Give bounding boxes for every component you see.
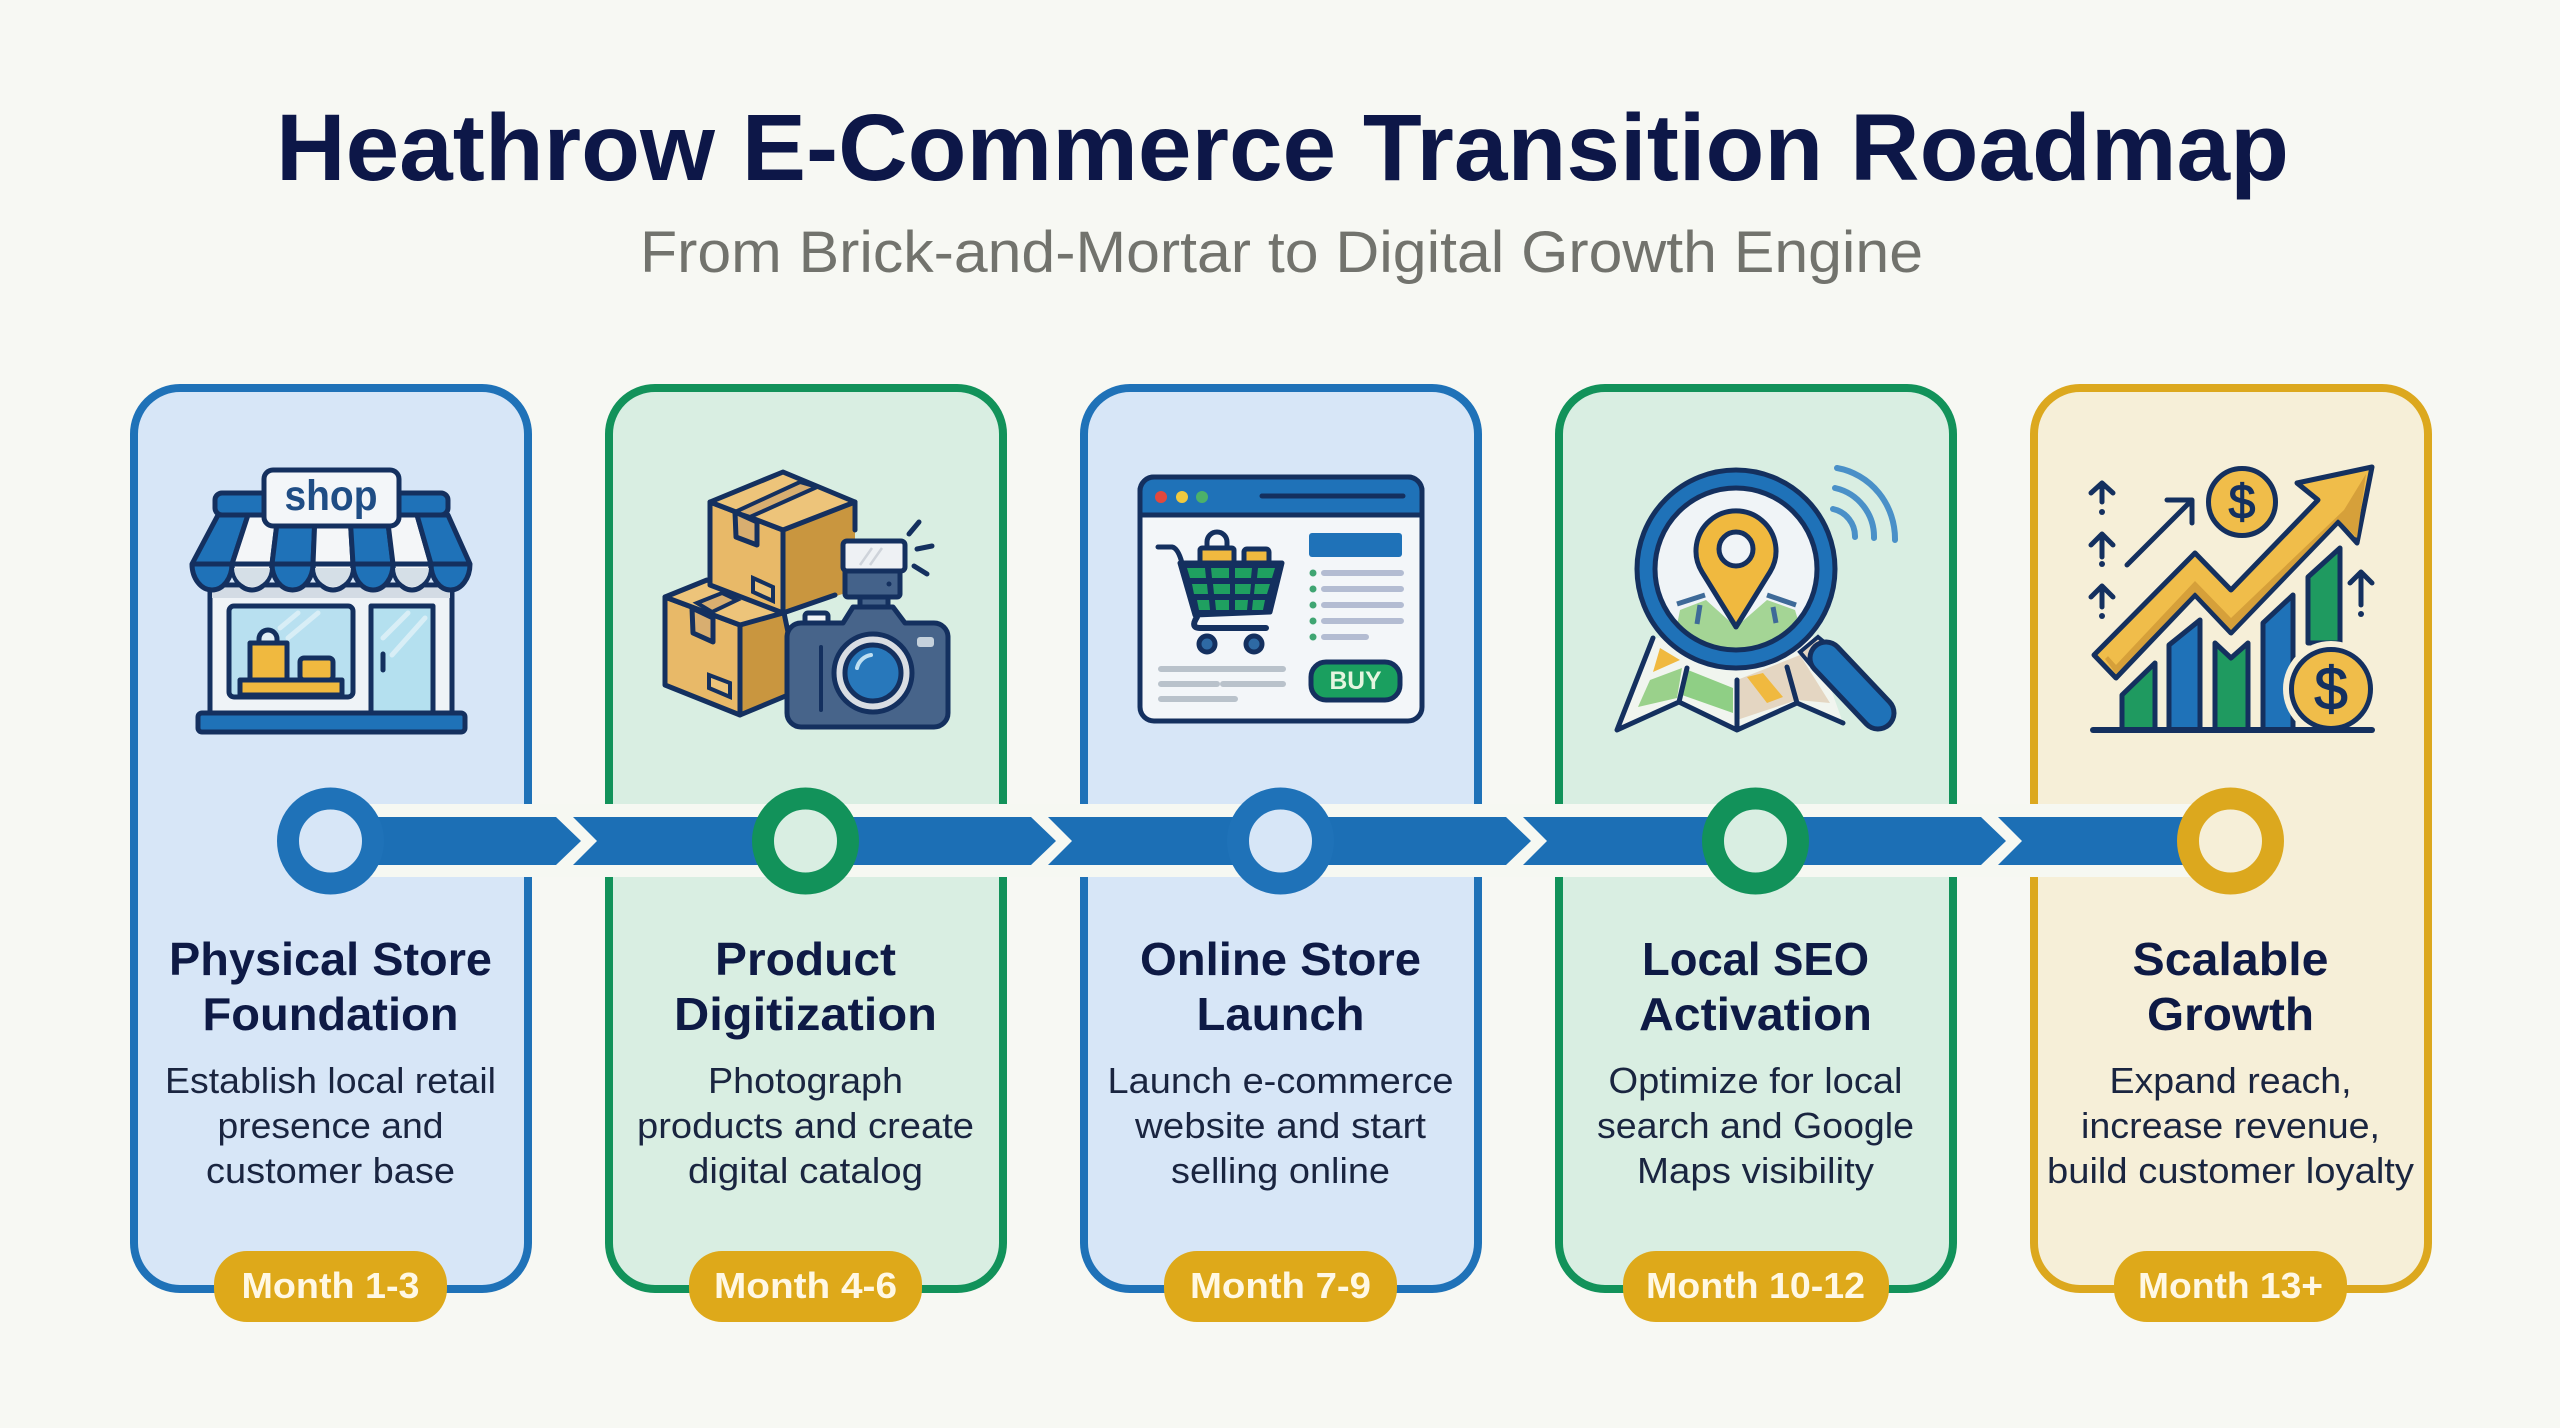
month badge: Month 13+ xyxy=(2138,1265,2323,1306)
step description xyxy=(2047,1060,2414,1191)
panel: local seo activation xyxy=(1559,388,1953,1322)
month badge: Month 7-9 xyxy=(1190,1265,1371,1306)
month badge xyxy=(214,1251,447,1322)
step description xyxy=(1597,1060,1914,1191)
step description: website and start xyxy=(1134,1105,1426,1146)
month badge xyxy=(1164,1251,1397,1322)
step description: products and create xyxy=(637,1105,974,1146)
step description: Photograph xyxy=(708,1060,903,1101)
timeline node 3 xyxy=(1238,798,1323,884)
panel: scalable growth xyxy=(2034,388,2428,1322)
timeline node 2 xyxy=(763,798,848,884)
step description: Expand reach, xyxy=(2110,1060,2352,1101)
step description xyxy=(637,1060,974,1191)
timeline node 5 xyxy=(2188,798,2273,884)
month badge: Month 10-12 xyxy=(1646,1265,1865,1306)
step description: customer base xyxy=(206,1150,455,1191)
step heading: Activation xyxy=(1639,988,1872,1040)
step description: search and Google xyxy=(1597,1105,1914,1146)
arrow segment 4 xyxy=(1523,817,2006,865)
step description: selling online xyxy=(1171,1150,1390,1191)
panel: online store launch xyxy=(1084,388,1478,1322)
icon: growth chart: $ xyxy=(2314,655,2348,722)
icon: online shop browser: BUY xyxy=(1330,667,1382,695)
step description xyxy=(165,1060,496,1191)
arrow segment 5 xyxy=(1998,817,2230,865)
step heading xyxy=(1639,933,1872,1040)
month badge: Month 4-6 xyxy=(714,1265,897,1306)
step heading: Launch xyxy=(1196,988,1364,1040)
title: Heathrow E-Commerce Transition Roadmap xyxy=(276,95,2289,201)
step heading: Foundation xyxy=(202,988,458,1040)
step heading xyxy=(2132,933,2328,1040)
step heading: Physical Store xyxy=(169,933,492,985)
step heading xyxy=(169,933,492,1040)
step heading: Online Store xyxy=(1140,933,1421,985)
timeline node 4 xyxy=(1713,798,1798,884)
subtitle: From Brick-and-Mortar to Digital Growth Engine xyxy=(640,220,1923,285)
step description: build customer loyalty xyxy=(2047,1150,2414,1191)
month badge xyxy=(689,1251,922,1322)
arrow segment 3 xyxy=(1048,817,1531,865)
step description: Optimize for local xyxy=(1608,1060,1902,1101)
step heading: Product xyxy=(715,933,896,985)
step heading xyxy=(674,933,937,1040)
month badge xyxy=(1623,1251,1889,1322)
panel: physical store foundation xyxy=(134,388,528,1322)
step description: Establish local retail xyxy=(165,1060,496,1101)
icon: growth chart: $ xyxy=(2229,476,2255,529)
step heading: Digitization xyxy=(674,988,937,1040)
arrow segment 2 xyxy=(573,817,1056,865)
icon: shop storefront: shop xyxy=(284,472,378,520)
step heading: Local SEO xyxy=(1642,933,1869,985)
icon: shop storefront xyxy=(192,470,470,732)
step heading: Scalable xyxy=(2132,933,2328,985)
step description: presence and xyxy=(218,1105,444,1146)
icon: growth chart xyxy=(2091,467,2379,737)
icon: boxes and camera xyxy=(665,472,948,727)
arrow segment 1 xyxy=(330,817,581,865)
step description: Maps visibility xyxy=(1637,1150,1874,1191)
month badge: Month 1-3 xyxy=(242,1265,420,1306)
step description xyxy=(1108,1060,1454,1191)
icon: map pin magnifier xyxy=(1617,468,1895,730)
panel: product digitization xyxy=(609,388,1003,1322)
icon: online shop browser xyxy=(1140,477,1422,721)
step description: digital catalog xyxy=(688,1150,923,1191)
timeline node 1 xyxy=(288,798,373,884)
step description: Launch e-commerce xyxy=(1108,1060,1454,1101)
month badge xyxy=(2114,1251,2347,1322)
step description: increase revenue, xyxy=(2081,1105,2380,1146)
timeline xyxy=(288,798,2273,884)
step heading xyxy=(1140,933,1421,1040)
step heading: Growth xyxy=(2147,988,2314,1040)
